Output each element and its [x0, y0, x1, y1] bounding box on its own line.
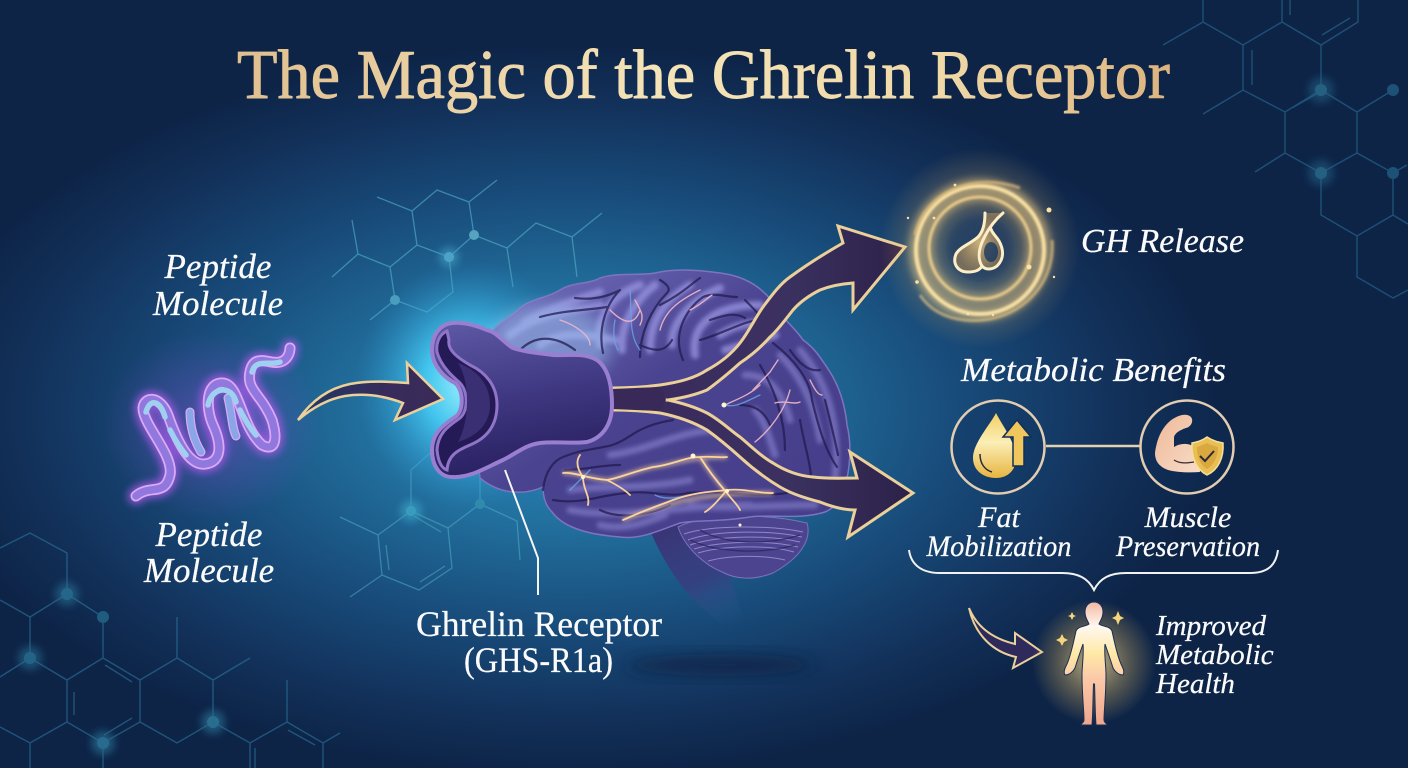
blue neural veins: [570, 290, 760, 498]
cyan glow behind receptor: [355, 260, 585, 510]
cerebrum: [470, 270, 850, 538]
connector between benefit icons: [1046, 445, 1141, 447]
receptor body: [432, 323, 612, 477]
title: The Magic of the Ghrelin Receptor: [237, 37, 1170, 114]
icon: muscle preservation: [1140, 400, 1234, 494]
peptide molecule label (top): [152, 247, 283, 323]
receptor cavity inner shade: [458, 363, 490, 442]
improved metabolic health label: Metabolic: [1155, 639, 1274, 671]
sparkles: [1056, 611, 1124, 646]
molecular hexagons: bottom left: [0, 533, 340, 768]
molecular hexagons: centre lower: [340, 453, 520, 597]
fat mobilization label: Mobilization: [926, 530, 1072, 563]
glowing neural sparks: [581, 402, 742, 526]
improved metabolic health label: Improved: [1155, 610, 1267, 642]
icon: fat mobilization: [952, 400, 1044, 494]
brain: [470, 270, 850, 640]
fat mobilization label: [926, 501, 1072, 563]
receptor leader line: [505, 470, 538, 595]
icon: GH release glowing rings: [880, 148, 1080, 348]
molecular hexagons: centre top: [332, 180, 602, 320]
arrow: to metabolic benefits: [612, 400, 913, 537]
cerebellum: [678, 516, 808, 578]
icon: pituitary gland: [955, 213, 1003, 272]
arrow: benefits to health: [969, 608, 1042, 668]
muscle preservation label: Muscle: [1144, 501, 1231, 534]
muscle preservation label: [1115, 501, 1260, 563]
fat mobilization label: Fat: [977, 501, 1020, 534]
ghrelin receptor: [432, 323, 612, 477]
muscle preservation label: Preservation: [1115, 530, 1260, 563]
improved metabolic health label: Health: [1155, 668, 1235, 700]
GH release label: GH Release: [1081, 223, 1244, 260]
gold neural veins: [563, 455, 773, 520]
receptor cavity: [437, 331, 497, 470]
peptide molecule label (bottom): Molecule: [143, 551, 274, 590]
icon: peptide molecule: [102, 330, 322, 520]
ghrelin receptor label: [416, 604, 662, 680]
brain highlights: [510, 285, 836, 527]
improved metabolic health label: [1155, 610, 1274, 700]
molecular hexagons: top right: [1163, 0, 1408, 298]
ghrelin receptor label: Ghrelin Receptor: [416, 604, 662, 644]
ghrelin receptor label: (GHS-R1a): [464, 640, 613, 680]
light blue glow on frontal lobe: [488, 305, 612, 385]
metabolic benefits heading: Metabolic Benefits: [960, 352, 1226, 389]
peptide molecule label (top): Peptide: [164, 247, 271, 286]
brain stem: [650, 520, 760, 640]
peptide molecule label (bottom): [143, 515, 274, 590]
brace joining benefits: [909, 550, 1278, 590]
peptide molecule label (bottom): Peptide: [155, 515, 262, 554]
icon: glowing human body: [1032, 600, 1156, 725]
arrow: to GH release: [612, 226, 905, 400]
peptide molecule label (top): Molecule: [152, 284, 283, 323]
arrows: branching pathways: [612, 226, 913, 537]
arrow fork cover: [612, 387, 666, 411]
arrow: peptide to receptor: [298, 363, 443, 420]
shadow under brain: [625, 654, 815, 676]
sulci: [520, 278, 838, 515]
